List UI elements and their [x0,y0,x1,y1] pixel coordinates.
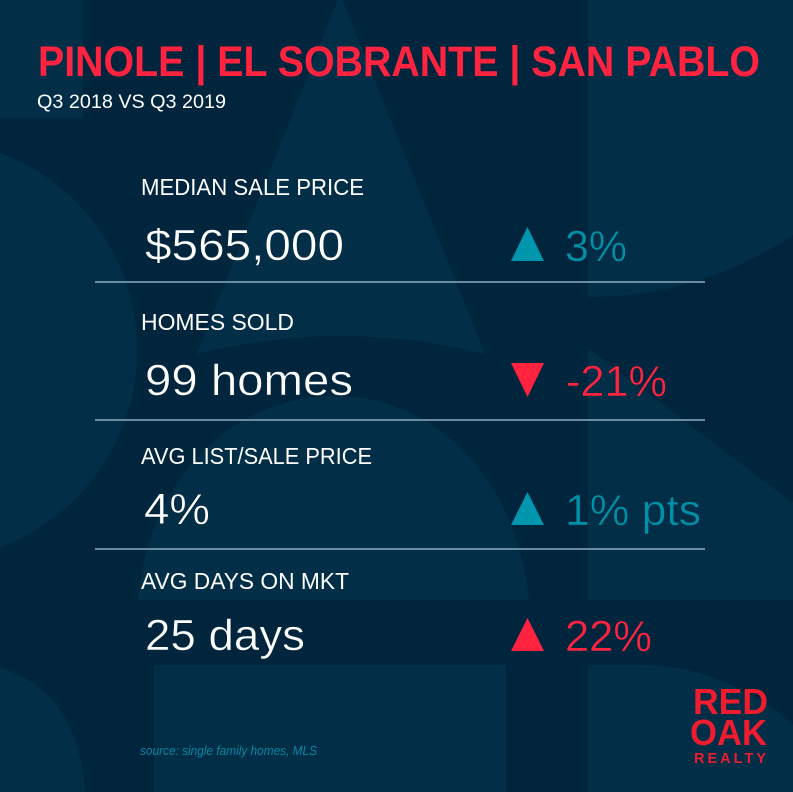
row: homes sold [141,309,667,406]
label: avg list/sale price: AVG LIST/SALE PRICE [141,443,372,469]
logo: Red Oak Realty: RED [693,681,768,722]
change: 1% pts: 1% pts [565,486,701,535]
source note: source: single family homes, MLS [140,744,318,758]
logo: Red Oak Realty: OAK [690,712,767,753]
logo: Red Oak Realty [690,681,768,767]
change: 3%: 3% [565,222,627,271]
value: avg days on mkt: 25 days [145,611,305,660]
icon: up triangle teal [511,492,544,525]
row: average list to sale price [141,443,701,535]
value: homes sold: 99 homes [145,356,353,405]
icon: up triangle teal [511,227,544,261]
icon: up triangle red [511,618,544,651]
label: avg days on mkt: AVG DAYS ON MKT [141,568,349,594]
value: avg list/sale price: 4% [144,485,210,534]
icon: down triangle red [511,363,544,397]
row: average days on market [141,568,652,661]
row: median sale price [141,174,627,271]
logo: Red Oak Realty: REALTY [694,751,766,767]
change: -21%: -21% [566,357,667,406]
label: median sale price: MEDIAN SALE PRICE [141,174,364,200]
subtitle: Q3 2018 VS Q3 2019 [37,91,226,113]
label: homes sold: HOMES SOLD [141,309,294,335]
change: 22%: 22% [565,612,652,661]
value: median sale price: $565,000 [145,221,344,270]
